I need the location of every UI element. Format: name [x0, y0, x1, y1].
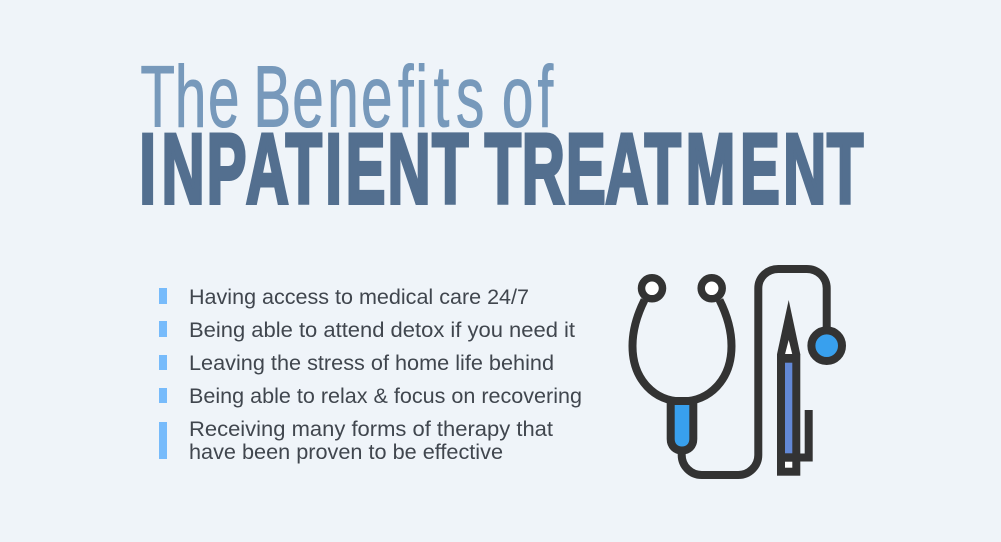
item: medical care: Having access to medical care 24/7 — [189, 286, 529, 309]
item: relax: Being able to relax & focus on recovering — [189, 385, 582, 408]
item: therapy: Receiving many forms of therapy that — [189, 418, 553, 441]
item: home stress: Leaving the stress of home life behind — [189, 352, 554, 375]
title — [139, 48, 863, 225]
item: therapy: have been proven to be effective — [189, 441, 503, 464]
item: detox: Being able to attend detox if you need it — [189, 319, 575, 342]
icon: stethoscope chest piece — [811, 330, 842, 361]
benefits list — [159, 286, 582, 464]
icon: stethoscope ear tips — [642, 278, 722, 299]
icon: stethoscope headset tubes — [632, 300, 732, 402]
icon: pencil — [777, 300, 809, 476]
icon: stethoscope stem — [671, 401, 693, 450]
bullet 5 — [159, 422, 167, 459]
bullet 1 — [159, 288, 167, 304]
bullet 3 — [159, 355, 167, 370]
bullet 4 — [159, 388, 167, 403]
icon: stethoscope tube — [682, 269, 827, 475]
item: therapy — [189, 418, 553, 464]
icon: stethoscope and pencil — [632, 269, 842, 476]
title line: INPATIENT TREATMENT: INPATIENT TREATMENT — [139, 114, 863, 225]
bullet 2 — [159, 321, 167, 337]
title line: The Benefits of: The Benefits of — [140, 48, 554, 145]
